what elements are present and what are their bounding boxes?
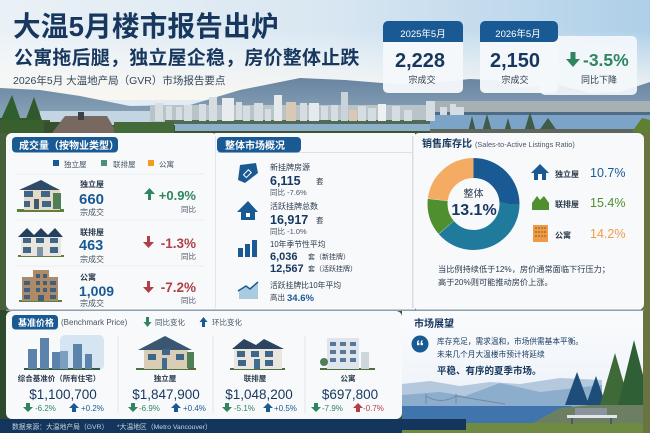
card: 2025 May: 2,228 [395,50,445,72]
legend: detached ratio: 10.7% [590,166,625,180]
new listings: 同比 -7.6% [270,187,307,197]
benchmark: composite: 综合基准价（所有住宅） [18,373,100,383]
ten year seasonal average: 套（活跃挂牌） [308,264,357,273]
card: 2025 May: 2025年5月 [400,28,446,40]
legend [53,159,174,169]
active listings vs ten year average: 34.6% [287,293,314,304]
icon: detached house [136,336,196,370]
legend: townhouse ratio: 15.4% [590,196,625,210]
card: 2026 May: 2,150 [490,50,540,72]
active listings vs ten year average: 高出 [270,292,285,302]
new listings [270,162,324,197]
legend: townhouse ratio [532,196,625,210]
card: 2026 May [480,21,558,93]
footer bar [0,419,402,433]
heading pill [12,137,119,152]
ten year seasonal average: 套（新挂牌） [308,252,350,261]
benchmark: detached [128,373,206,413]
card: 2025 May: 宗成交 [408,74,436,85]
card: 2026 May: 宗成交 [501,74,529,85]
row: townhouse sales: -1.3% [161,236,196,251]
icon: apartment tower [320,338,375,370]
row: townhouse sales: 同比 [181,251,196,261]
heading pill: 成交量（按物业类型） [19,139,119,152]
icon: detached house [17,180,64,212]
divider band between rows [6,310,644,311]
footer bar: *大温地区（Metro Vancouver） [117,422,212,431]
panel: market overview [215,133,415,310]
icon: down arrow green [566,52,580,67]
icon: townhouse [230,339,285,370]
ten year seasonal average: 10年季节性平均 [270,239,326,249]
icon: townhouse [18,228,64,257]
card: year-over-year change: 同比下降 [581,74,617,85]
icon: house [237,201,258,220]
ten year seasonal average: 12,567 [270,263,304,275]
panel: market outlook [402,311,643,433]
active listings vs ten year average: 活跃挂牌比10年平均 [270,280,341,290]
benchmark: composite [18,373,104,413]
outlook text: 库存充足，需求温和，市场供需基本平衡。 [437,336,583,346]
row: apartment sales: -7.2% [161,280,196,295]
active listings [270,201,324,236]
benchmark: detached: 独立屋 [154,373,177,383]
icon: city composite [24,335,104,370]
row: townhouse sales: 宗成交 [80,254,104,264]
heading pill [12,315,58,330]
legend: 同比变化 [155,317,185,327]
active listings: 活跃挂牌总数 [270,201,318,211]
active listings: 同比 -1.0% [270,226,307,236]
row: detached sales [79,179,196,217]
row: apartment sales: 宗成交 [80,298,104,308]
card: 2026 May: 2026年5月 [495,28,541,40]
heading pill [217,137,301,152]
card: 2025 May [383,21,463,93]
benchmark: composite: $1,100,700 [29,387,97,402]
row: townhouse sales: 联排屋 [80,227,104,237]
new listings: 6,115 [270,174,301,188]
icon: quote bubble: “ [416,337,424,356]
legend: apartment ratio: 14.2% [590,227,625,241]
heading: (Sales-to-Active Listings Ratio) [475,140,575,149]
heading: 市场展望 [414,317,454,330]
note [438,264,610,287]
benchmark: composite: -6.2% [35,404,56,413]
row: detached sales: 同比 [181,204,196,214]
benchmark: townhouse: 联排屋 [244,373,267,383]
benchmark: townhouse: -5.1% [234,404,255,413]
card: year-over-year change: -3.5% [583,50,629,70]
benchmark: detached: $1,847,900 [132,387,200,402]
report source line: 2026年5月 大温地产局（GVR）市场报告要点 [13,74,225,87]
icon: bar chart [238,240,257,257]
ten year seasonal average [270,239,357,275]
row: townhouse sales: 463 [79,238,103,254]
heading pill: 基准价格 [18,317,54,328]
active listings vs ten year average [270,280,341,304]
note: 高于20%则可能推动房价上涨。 [438,277,553,287]
row: detached sales: 660 [79,191,104,208]
benchmark: apartment: $697,800 [322,387,378,402]
landscape illustration [402,340,643,433]
active listings: 套 [316,215,324,225]
icon: apartment [19,270,62,302]
donut chart: 13.1% [451,202,497,219]
donut chart [438,168,510,240]
outlook text: 未来几个月大温楼市预计将延续 [437,349,545,359]
legend: townhouse ratio: 联排屋 [555,199,579,209]
donut chart: 整体 [464,187,484,200]
panel: sales-to-active listings ratio [412,133,644,310]
benchmark: apartment: 公寓 [340,373,356,383]
row: apartment sales: 1,009 [79,283,114,299]
benchmark: detached: -6.9% [139,404,160,413]
outlook text [437,336,583,377]
row: detached sales: 宗成交 [80,207,104,217]
new listings: 套 [316,176,324,186]
benchmark: detached: +0.4% [183,404,206,413]
legend: 联排屋 [113,159,136,169]
heading [422,137,575,150]
benchmark: composite: +0.2% [81,404,104,413]
legend: 公寓 [159,159,174,169]
outlook text: 平稳、有序的夏季市场。 [437,365,542,377]
row: townhouse sales [79,227,196,264]
legend: detached ratio [531,164,625,180]
legend: apartment ratio: 公寓 [555,230,571,240]
legend: detached ratio: 独立屋 [555,169,579,179]
card: year-over-year change [540,36,637,95]
legend [144,317,242,327]
icon: price tag [238,163,258,183]
legend: 环比变化 [212,317,242,327]
row: apartment sales: 同比 [181,295,196,305]
title: 大温5月楼市报告出炉 [13,11,279,42]
skyline towers [155,92,464,121]
row: apartment sales [79,272,196,308]
legend: apartment ratio [533,225,625,242]
note: 当比例持续低于12%，房价通常面临下行压力； [438,264,610,274]
row: detached sales: 独立屋 [80,179,104,189]
active listings: 16,917 [270,213,308,227]
benchmark: townhouse: $1,048,200 [225,387,293,402]
footer bar: 数据来源：大温地产局（GVR） [12,422,108,431]
ten year seasonal average: 6,036 [270,251,298,263]
panel: benchmark price [6,311,402,419]
heading: 销售库存比 [422,137,472,150]
benchmark: apartment: -7.9% [322,404,343,413]
trees left and house roof [0,95,650,135]
icon: quote bubble [412,336,428,356]
legend: 独立屋 [64,159,87,169]
benchmark: townhouse [222,373,297,413]
icon: rising line chart [238,282,258,299]
benchmark: apartment: -0.7% [363,404,384,413]
new listings: 新挂牌房源 [270,162,310,172]
row: apartment sales: 公寓 [80,272,96,282]
side foliage [0,133,650,433]
panel: sales by property type [6,133,218,310]
subtitle: 公寓拖后腿，独立屋企稳，房价整体止跌 [14,46,360,69]
row: detached sales: +0.9% [159,188,196,203]
benchmark: townhouse: +0.5% [274,404,297,413]
benchmark: apartment [311,373,384,413]
heading pill: 整体市场概况 [225,139,285,152]
heading english: (Benchmark Price) [61,318,128,327]
